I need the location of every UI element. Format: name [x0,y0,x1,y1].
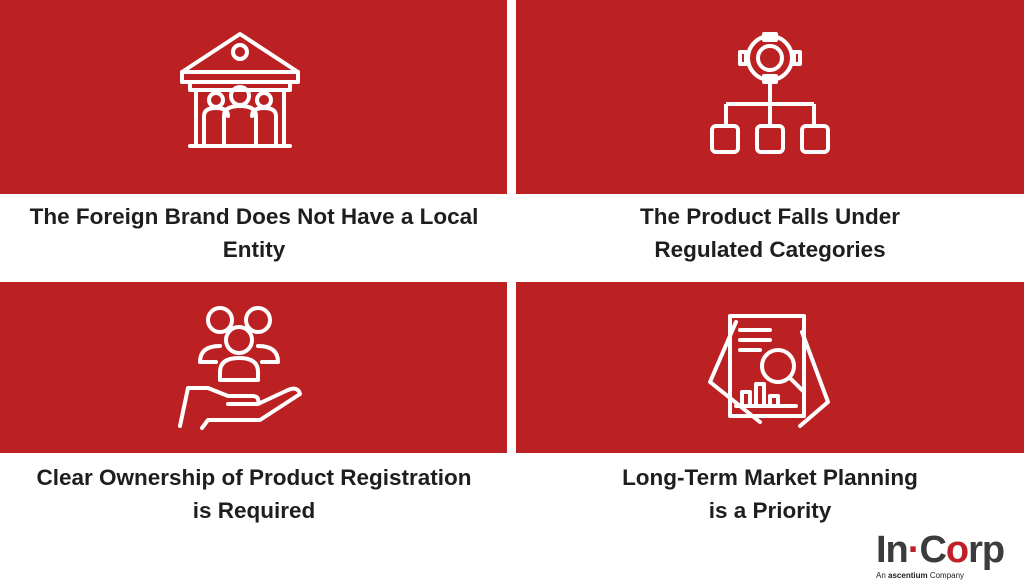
text: bottom left [36,465,472,523]
panel: bottom right [516,282,1024,453]
text: bottom left: Clear Ownership of Product Registration [36,465,472,490]
panel: bottom left [0,282,507,453]
icon: building with people [180,32,300,148]
text: top right [640,204,900,262]
text: top left: Entity [223,237,285,262]
text: top right: The Product Falls Under [640,204,900,229]
icon: hand with people [178,306,302,430]
logo: An ascentium Company [876,571,964,580]
text: top left [30,204,478,262]
icon: gear hierarchy [710,32,830,154]
text: bottom right: Long-Term Market Planning [622,465,918,490]
text: top left: The Foreign Brand Does Not Have a Local [30,204,478,229]
icon: documents with magnifier [708,314,830,428]
text: bottom left: is Required [193,498,315,523]
logo: In·Corp [876,529,1004,571]
text: bottom right [622,465,918,523]
text: top right: Regulated Categories [654,237,886,262]
panel: top left [0,0,507,194]
text: bottom right: is a Priority [709,498,831,523]
panel: top right [516,0,1024,194]
